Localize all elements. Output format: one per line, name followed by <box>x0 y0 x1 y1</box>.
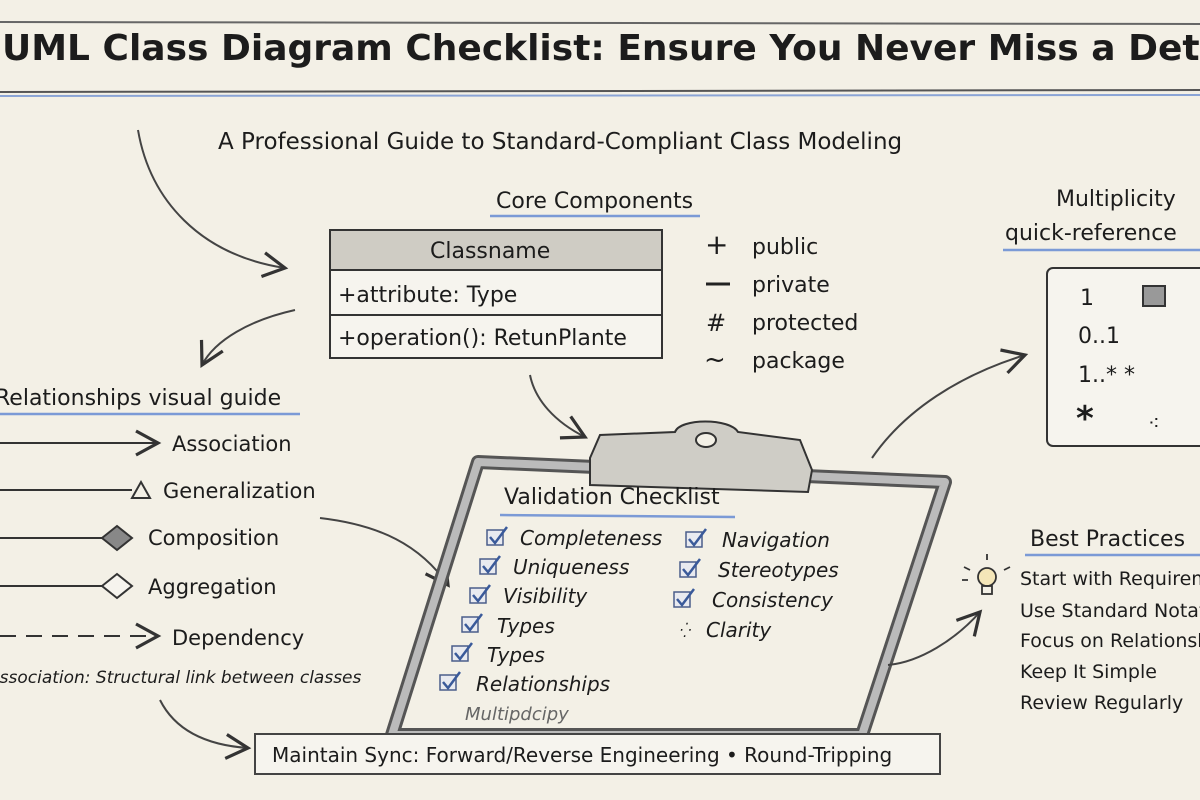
panel: multiplicity: ⁖ <box>1148 411 1160 435</box>
panel: multiplicity: * <box>1076 399 1094 439</box>
panel: relationships: Aggregation <box>148 575 277 599</box>
arrow: relationships to clipboard <box>320 518 448 585</box>
panel: relationships: Dependency <box>172 626 304 650</box>
arrow: title to class <box>138 130 285 268</box>
checklist items: Completeness <box>520 526 662 550</box>
visibility legend: protected <box>752 311 858 336</box>
checklist items: Relationships <box>476 672 610 696</box>
checklist items: ⁛ <box>680 623 691 639</box>
checklist items: Multipdcipy <box>465 704 569 725</box>
panel: best practices: Review Regularly <box>1020 692 1183 714</box>
checklist items: Types <box>487 643 545 667</box>
arrow: to bottom bar <box>160 700 248 748</box>
checklist items: Clarity <box>706 618 772 642</box>
arrow: class to relationships <box>202 310 295 365</box>
checklist items: Visibility <box>503 584 588 608</box>
class box: +operation(): RetunPlante <box>338 326 627 351</box>
visibility legend: private <box>752 273 830 298</box>
checklist items: Navigation <box>722 528 830 552</box>
checklist items: Uniqueness <box>513 555 629 579</box>
icon: light bulb <box>962 554 1010 594</box>
visibility legend: package <box>752 349 845 374</box>
panel: relationships: Association <box>172 432 292 456</box>
clipboard <box>392 422 945 735</box>
panel: relationships: Generalization <box>163 479 316 503</box>
bottom bar: sync <box>255 734 940 774</box>
subtitle: A Professional Guide to Standard-Compliant Class Modeling <box>218 129 902 155</box>
checklist items <box>465 526 839 725</box>
arrow: clipboard to multiplicity <box>872 355 1025 458</box>
class box <box>330 230 662 358</box>
panel: relationships <box>0 386 362 688</box>
panel: multiplicity: quick-reference <box>1005 221 1177 246</box>
bottom bar: sync: Maintain Sync: Forward/Reverse Engineering • Round-Tripping <box>272 743 892 767</box>
visibility legend: + <box>705 228 728 261</box>
panel: multiplicity: 1 <box>1080 286 1094 311</box>
panel: relationships: Relationships visual guide <box>0 386 281 411</box>
visibility legend: # <box>706 309 726 337</box>
arrow: clipboard to best practices <box>888 612 980 665</box>
panel: multiplicity: 0..1 <box>1078 324 1120 349</box>
checklist items: Types <box>497 614 555 638</box>
class box: Classname <box>430 239 550 264</box>
checklist heading: Validation Checklist <box>504 485 720 510</box>
panel: best practices <box>962 527 1200 714</box>
panel: multiplicity: Multiplicity <box>1056 187 1176 212</box>
panel: best practices: Best Practices <box>1030 527 1185 552</box>
panel: core components: Core Components <box>496 189 693 214</box>
visibility legend <box>704 228 858 375</box>
panel: core components <box>330 189 858 375</box>
visibility legend: ~ <box>704 345 726 375</box>
panel: multiplicity: 1..* * <box>1078 363 1135 388</box>
class box: +attribute: Type <box>338 283 517 308</box>
panel: best practices: Keep It Simple <box>1020 661 1157 683</box>
arrow: class to clipboard <box>530 375 585 437</box>
checklist items: Stereotypes <box>718 558 839 582</box>
checklist items: Consistency <box>712 588 834 612</box>
panel: multiplicity <box>1003 187 1200 446</box>
panel: relationships: Composition <box>148 526 279 550</box>
visibility legend: public <box>752 235 818 260</box>
